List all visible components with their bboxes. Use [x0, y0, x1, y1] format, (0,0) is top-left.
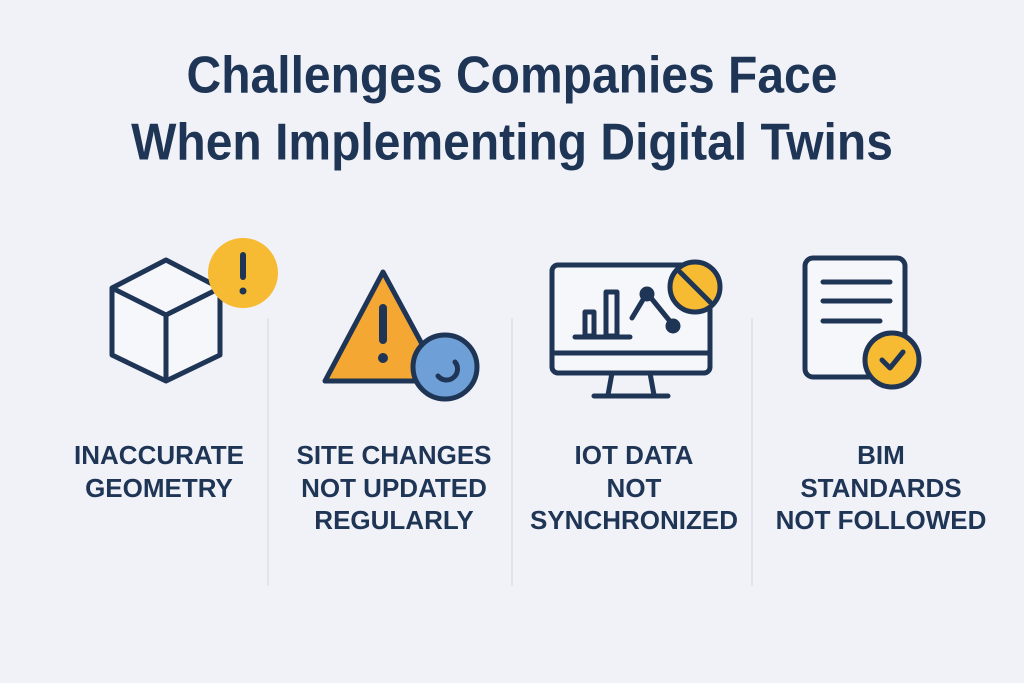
icon: warning triangle with refresh: [325, 272, 477, 399]
title: [131, 47, 893, 172]
label 3: NOT: [607, 472, 661, 502]
icon: cube with warning: [112, 238, 278, 381]
icon: document with check: [805, 258, 919, 387]
label 4: BIM: [857, 440, 905, 470]
label 1: [74, 440, 244, 502]
label 1: GEOMETRY: [85, 472, 233, 502]
label 4: STANDARDS: [800, 472, 962, 502]
label 3: [530, 440, 738, 535]
label 2: [296, 440, 492, 535]
label 4: NOT FOLLOWED: [776, 505, 986, 535]
label 3: SYNCHRONIZED: [530, 505, 738, 535]
icon: monitor with chart and ban: [552, 262, 720, 396]
title: Challenges Companies Face: [187, 47, 837, 105]
title: When Implementing Digital Twins: [131, 114, 893, 172]
label 3: IOT DATA: [575, 440, 693, 470]
label 2: NOT UPDATED: [301, 472, 487, 502]
label 2: SITE CHANGES: [296, 440, 492, 470]
label 1: INACCURATE: [74, 440, 244, 470]
label 2: REGULARLY: [314, 505, 474, 535]
label 4: [776, 440, 986, 535]
